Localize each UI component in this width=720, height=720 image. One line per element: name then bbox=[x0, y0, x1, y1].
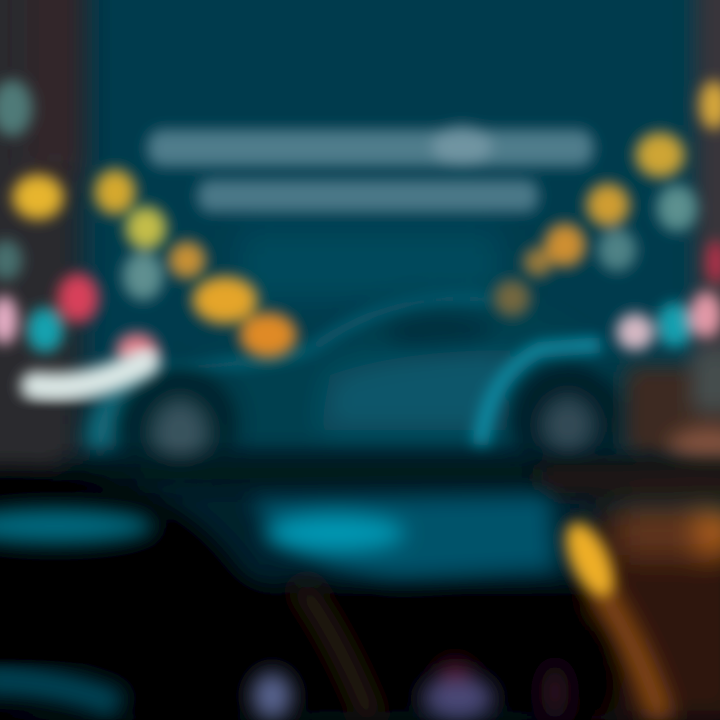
dashboard: bottom indicator lights bbox=[252, 662, 569, 720]
icon: rear wheel bbox=[510, 364, 626, 476]
dashboard: bottom-left teal arc bbox=[0, 680, 120, 706]
car: teal sports car body bbox=[90, 293, 640, 450]
orange light streak bbox=[600, 590, 662, 720]
left bokeh street lights bbox=[0, 80, 296, 366]
title: illegible blurred text block bbox=[148, 126, 593, 212]
windshield band: left teal bbox=[0, 508, 155, 544]
orange right panel bbox=[590, 505, 720, 720]
yellow light bbox=[557, 516, 623, 604]
right bokeh street lights bbox=[494, 81, 720, 350]
icon: front wheel bbox=[118, 367, 238, 483]
windshield band: centre teal bbox=[250, 495, 555, 578]
dark road line bbox=[60, 460, 720, 486]
brown diagonal reflection bbox=[300, 585, 372, 720]
dark pillar between bands and right edge bbox=[530, 620, 620, 720]
white headlight swoosh bbox=[35, 362, 145, 387]
foreground: black car dashboard bbox=[0, 469, 720, 720]
brown right foreground glow bbox=[625, 350, 720, 470]
